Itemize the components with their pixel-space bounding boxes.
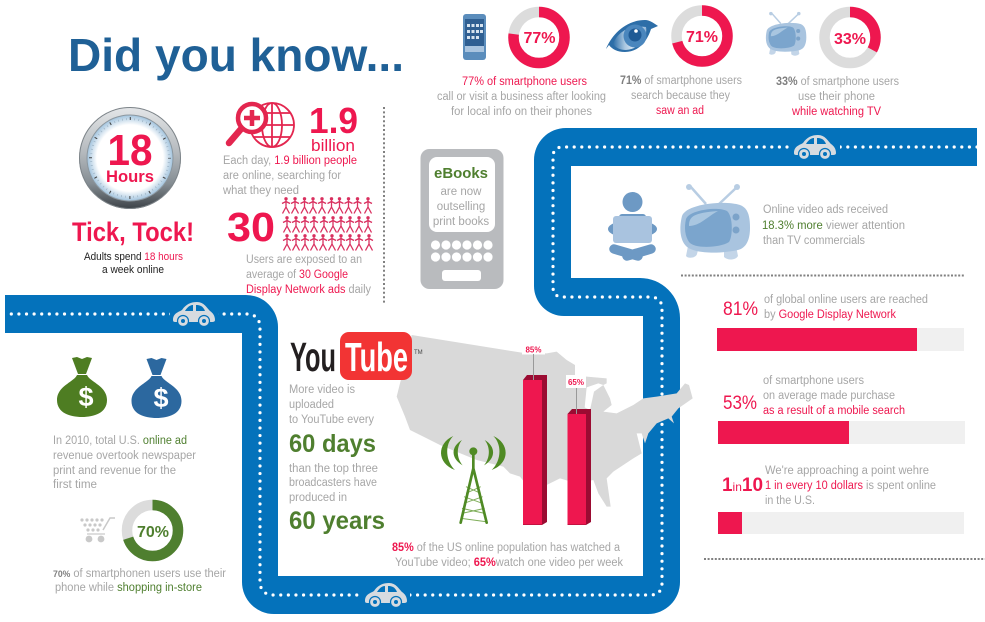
text: online video ads [762, 204, 905, 247]
stat: 81% reach: of global online users are reached [764, 294, 928, 306]
donut: 33%: 33% [834, 31, 866, 48]
icon: blue money bag [132, 358, 182, 418]
stat: 81% reach: by Google Display Network [764, 309, 896, 321]
car: left road [170, 302, 218, 326]
text: 70% of smartphone users [53, 568, 226, 594]
icon: small tv [766, 12, 806, 56]
text: 33% of smartphone users: while watching TV [791, 106, 881, 118]
car: bottom road [362, 583, 410, 608]
text: each day: are online, searching for [223, 170, 341, 182]
bar: 65% [566, 375, 591, 525]
text: 70% of smartphone users: 70% of smartphonen users use their [53, 568, 226, 580]
text: 71% of smartphone users: saw an ad [656, 105, 704, 117]
donut: 33% [824, 12, 876, 63]
stat: 1 in 10 dollars: 1in10 [722, 475, 763, 496]
text: 33% of smartphone users [776, 76, 899, 118]
icon: ebook reader: outselling [437, 201, 485, 213]
text: adults spend 18 hours: Adults spend 18 hours [84, 251, 183, 263]
text: each day [222, 155, 357, 197]
icon: smartphone [463, 14, 486, 60]
icon: ebook reader: eBooks [434, 165, 488, 182]
text: online video ads: than TV commercials [763, 235, 865, 247]
text: 77% of smartphone users: for local info on their phones [451, 106, 592, 118]
icon: ebook reader [420, 149, 504, 289]
stat: 53% purchase: of smartphone users [763, 375, 864, 387]
text: 71% of smartphone users: 71% of smartphone users [620, 75, 742, 87]
stat: 81% reach [717, 294, 964, 351]
stat: 1 in 10 dollars: 1 in every 10 dollars is spent online [765, 480, 936, 492]
icon: large tv [680, 184, 750, 260]
donut: 77% [514, 12, 564, 63]
text: 77% of smartphone users: 77% of smartphone users [462, 76, 587, 88]
text: online ad revenue: print and revenue for the [53, 465, 176, 477]
icon: green money bag [57, 357, 107, 417]
text: youtube audience [392, 542, 623, 569]
icon: grid of people [282, 197, 373, 250]
stat: 1 in 10 dollars: in the U.S. [765, 495, 815, 507]
text: 77% of smartphone users [437, 76, 606, 118]
stat: 60 days: 60 days [289, 430, 376, 458]
text: more video uploaded: More video is [289, 384, 355, 396]
stat: 53% purchase: as a result of a mobile search [763, 405, 905, 417]
donut: 77%: 77% [523, 30, 556, 47]
bar: 65%: 65% [568, 378, 584, 387]
stat: 60 years: 60 years [289, 507, 385, 535]
map: United States [397, 335, 693, 507]
text: adults spend 18 hours: a week online [102, 264, 164, 276]
title: Did you know... [68, 29, 404, 81]
text: users exposed: average of 30 Google [246, 269, 348, 281]
logo: YouTube: You [290, 334, 336, 380]
logo: YouTube: Tube [345, 334, 408, 380]
text: than the top three [289, 463, 378, 504]
donut: 71% [676, 10, 728, 62]
text: 77% of smartphone users: call or visit a business after looking [437, 91, 606, 103]
bar: 85% [522, 345, 547, 525]
stat: 1.9 billion: 1.9 [309, 100, 358, 141]
text: online ad revenue: In 2010, total U.S. online ad [53, 435, 187, 447]
donut: 70% [127, 505, 178, 556]
bar: 85%: 85% [525, 346, 542, 354]
logo: YouTube: TM [414, 350, 423, 356]
stat: 30: 30 [227, 204, 275, 250]
stat: 53% purchase [718, 375, 965, 444]
stat: 1.9 billion: billion [311, 136, 355, 155]
stat: 81% reach: 81% [723, 299, 758, 320]
stat: 53% purchase: 53% [723, 393, 757, 414]
text: 33% of smartphone users: use their phone [798, 91, 875, 103]
text: more video uploaded: to YouTube every [289, 414, 374, 426]
text: users exposed [246, 254, 371, 296]
text: users exposed: Display Network ads daily [246, 284, 371, 296]
donut: 71%: 71% [686, 29, 718, 46]
clock: 18 hours: Hours [106, 167, 154, 186]
icon: ebook reader: are now [441, 186, 482, 198]
clock: 18 hours: 18 [108, 126, 152, 175]
text: than the top three: than the top three [289, 463, 378, 475]
icon: eye [606, 20, 658, 52]
text: more video uploaded: uploaded [289, 399, 334, 411]
text: each day: what they need [222, 185, 299, 197]
text: than the top three: broadcasters have [289, 477, 377, 489]
icon: ebook reader: print books [433, 216, 489, 228]
logo: YouTube [290, 332, 423, 380]
text: online ad revenue: revenue overtook newspaper [53, 450, 196, 462]
text: youtube audience: YouTube video; 65%watch one video per week [395, 557, 623, 569]
text: online ad revenue [53, 435, 196, 491]
donut: 70%: 70% [137, 524, 169, 541]
text: users exposed: Users are exposed to an [246, 254, 362, 266]
icon: person with laptop [608, 192, 657, 256]
stat: 53% purchase: on average made purchase [763, 390, 895, 402]
stat: 1 in 10 dollars: We're approaching a point wehre [765, 465, 929, 477]
text: 70% of smartphone users: phone while shopping in-store [55, 582, 202, 594]
icon: shopping cart [80, 518, 115, 542]
text: 71% of smartphone users: search because they [631, 90, 730, 102]
clock: 18 hours [79, 107, 181, 209]
text: each day: Each day, 1.9 billion people [223, 155, 357, 167]
text: online ad revenue: first time [53, 479, 97, 491]
stat: 1 in 10 dollars [718, 465, 964, 534]
text: 33% of smartphone users: 33% of smartphone users [776, 76, 899, 88]
text: online video ads: Online video ads received [763, 204, 888, 216]
heading: Tick, Tock: Tick, Tock! [72, 217, 194, 247]
text: more video uploaded [289, 384, 374, 426]
text: adults spend 18 hours [84, 251, 183, 276]
text: online video ads: 18.3% more viewer attention [762, 220, 905, 232]
icon: blue money bag: $ [153, 383, 169, 413]
icon: signal tower [441, 436, 506, 523]
text: youtube audience: 85% of the US online population has watched a [392, 542, 621, 554]
text: 71% of smartphone users [620, 75, 742, 117]
car: top road [792, 135, 840, 160]
icon: magnifier and globe [229, 103, 294, 147]
icon: green money bag: $ [78, 382, 94, 412]
road [5, 128, 977, 614]
text: than the top three: produced in [289, 492, 347, 504]
